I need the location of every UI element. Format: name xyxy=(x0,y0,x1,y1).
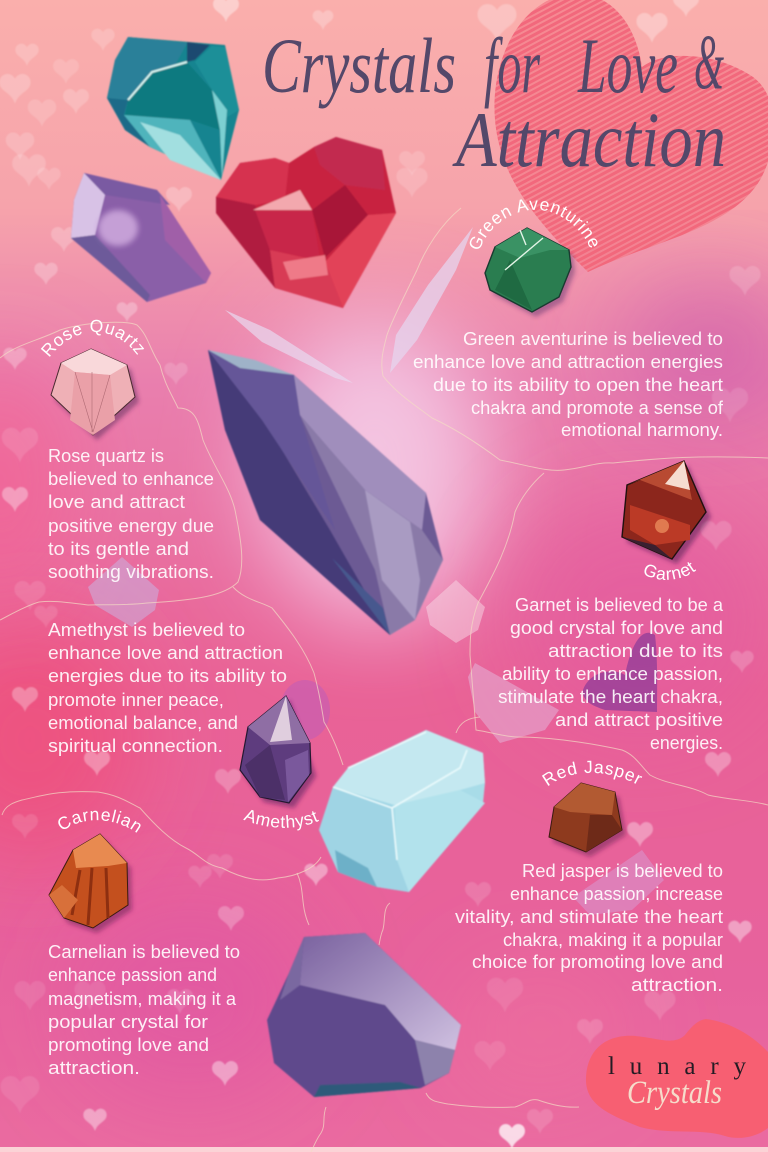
crystal: teal gem xyxy=(107,37,239,180)
scribbled coral heart xyxy=(480,0,768,280)
curved label: Amethyst: Amethyst xyxy=(243,810,319,830)
text: Green Aventurine description: chakra and promote a sense of xyxy=(471,397,724,418)
crystal: large amethyst shard xyxy=(208,350,443,635)
text: Rose Quartz description: love and attract xyxy=(48,491,185,512)
text: Red Jasper description: Red jasper is believed to xyxy=(522,860,723,881)
title: & xyxy=(694,18,724,105)
text: Rose Quartz description xyxy=(48,445,214,582)
text: Carnelian description: promoting love and xyxy=(48,1034,209,1055)
text: Rose Quartz description: Rose quartz is xyxy=(48,445,164,466)
crystal: carnelian xyxy=(49,834,132,933)
curved label: Carnelian xyxy=(58,810,141,833)
text: Red Jasper description: vitality, and stimulate the heart xyxy=(455,906,723,927)
text: Green Aventurine description: enhance love and attraction energies xyxy=(413,351,723,372)
text: Garnet description: ability to enhance passion, xyxy=(502,663,723,684)
curved label: Carnelian: Carnelian xyxy=(58,810,141,833)
crystal: green aventurine xyxy=(485,228,575,317)
title: for xyxy=(484,22,540,109)
text: Rose Quartz description: to its gentle and xyxy=(48,538,189,559)
text: Red Jasper description xyxy=(455,860,723,995)
text: Green Aventurine description: emotional harmony. xyxy=(561,419,723,440)
text: Garnet description: good crystal for love and xyxy=(510,617,723,638)
text: Garnet description: and attract positive xyxy=(555,709,723,730)
text: Amethyst description: promote inner peace, xyxy=(48,689,224,710)
text: Amethyst description xyxy=(48,619,287,756)
text: Garnet description: Garnet is believed to be a xyxy=(515,594,724,615)
curved label: Rose Quartz: Rose Quartz xyxy=(40,320,144,357)
text: Rose Quartz description: soothing vibrations. xyxy=(48,561,214,582)
text: Carnelian description: popular crystal for xyxy=(48,1011,208,1032)
crystal: small amethyst cluster xyxy=(240,696,316,808)
crystal: red jasper xyxy=(549,783,626,857)
title xyxy=(262,18,726,183)
text: Amethyst description: enhance love and attraction xyxy=(48,642,283,663)
curved label: Garnet: Garnet xyxy=(644,562,696,580)
text: Carnelian description: attraction. xyxy=(48,1057,140,1078)
crystal: garnet xyxy=(622,461,711,564)
logo: lunary Crystals xyxy=(586,1019,768,1138)
text: Amethyst description: energies due to its ability to xyxy=(48,665,287,686)
text: Carnelian description: magnetism, making it a xyxy=(48,988,237,1009)
text: Red Jasper description: choice for promoting love and xyxy=(472,951,723,972)
text: Red Jasper description: attraction. xyxy=(631,974,723,995)
logo: lunary Crystals: Crystals xyxy=(627,1075,722,1111)
text: Rose Quartz description: believed to enhance xyxy=(48,468,214,489)
text: Red Jasper description: enhance passion, increase xyxy=(510,883,723,904)
text: Amethyst description: emotional balance, and xyxy=(48,712,238,733)
text: Green Aventurine description xyxy=(413,328,724,440)
translucent background crystals xyxy=(88,227,664,915)
text: Carnelian description: Carnelian is believed to xyxy=(48,941,240,962)
crystal: red heart xyxy=(216,137,396,308)
title: Crystals xyxy=(262,22,456,109)
text: Carnelian description xyxy=(48,941,240,1078)
title: Love xyxy=(577,22,678,109)
text: Green Aventurine description: Green aventurine is believed to xyxy=(463,328,723,349)
crystal: rose quartz xyxy=(51,349,139,440)
text: Rose Quartz description: positive energy due xyxy=(48,515,214,536)
text: Green Aventurine description: due to its ability to open the heart xyxy=(433,374,723,395)
title: Attraction xyxy=(452,96,726,183)
text: Garnet description: energies. xyxy=(650,732,723,753)
text: Amethyst description: spiritual connection. xyxy=(48,735,223,756)
crystal: aqua gem xyxy=(319,730,485,892)
text: Amethyst description: Amethyst is believed to xyxy=(48,619,245,640)
crystal: bottom violet stone xyxy=(267,933,461,1097)
text: Carnelian description: enhance passion and xyxy=(48,964,217,985)
logo: lunary Crystals: lunary xyxy=(608,1053,746,1080)
text: Red Jasper description: chakra, making it a popular xyxy=(503,929,723,950)
curved label: Garnet xyxy=(644,562,696,580)
text: Garnet description: stimulate the heart chakra, xyxy=(498,686,723,707)
text: Garnet description xyxy=(498,594,724,753)
text: Garnet description: attraction due to its xyxy=(548,640,723,661)
curved label: Green Aventurine: Green Aventurine xyxy=(470,199,598,249)
crystal: purple amethyst point xyxy=(71,173,211,302)
curved label: Red Jasper: Red Jasper xyxy=(542,760,642,786)
